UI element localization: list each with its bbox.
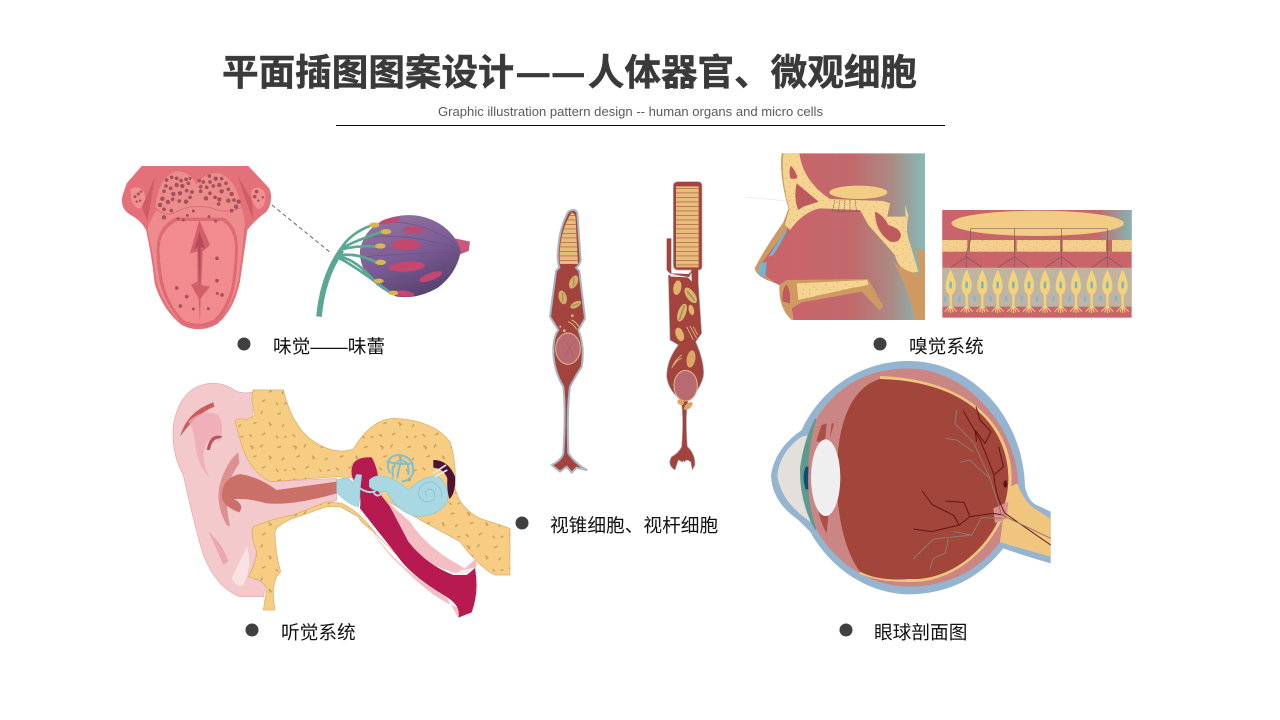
label: taste: 味觉——味蕾 [273,336,385,357]
label: retina cells: 视锥细胞、视杆细胞 [550,515,718,536]
subtitle: Graphic illustration pattern design -- human organs and micro cells [438,104,823,119]
bullet: smell [874,338,886,350]
title: 平面插图图案设计——人体器官、微观细胞 [222,52,917,93]
bullet: taste [238,338,250,350]
illustration: cone cell [550,210,587,473]
label: eyeball: 眼球剖面图 [874,622,967,643]
title underline [336,125,945,126]
illustration: nasal cross-section [746,153,925,320]
bullet: retina cells [516,516,528,530]
bullet: eyeball [840,624,852,636]
dashed connector [272,205,331,253]
illustration: tongue [122,166,271,329]
illustration: taste bud [319,215,470,317]
illustration: rod cell [667,182,704,470]
illustration: ear [173,383,510,618]
bullet: hearing [246,624,258,636]
label: smell: 嗅觉系统 [909,336,984,357]
illustration: eyeball [771,361,1051,594]
label: hearing: 听觉系统 [281,622,356,643]
illustration: olfactory detail [942,210,1132,318]
